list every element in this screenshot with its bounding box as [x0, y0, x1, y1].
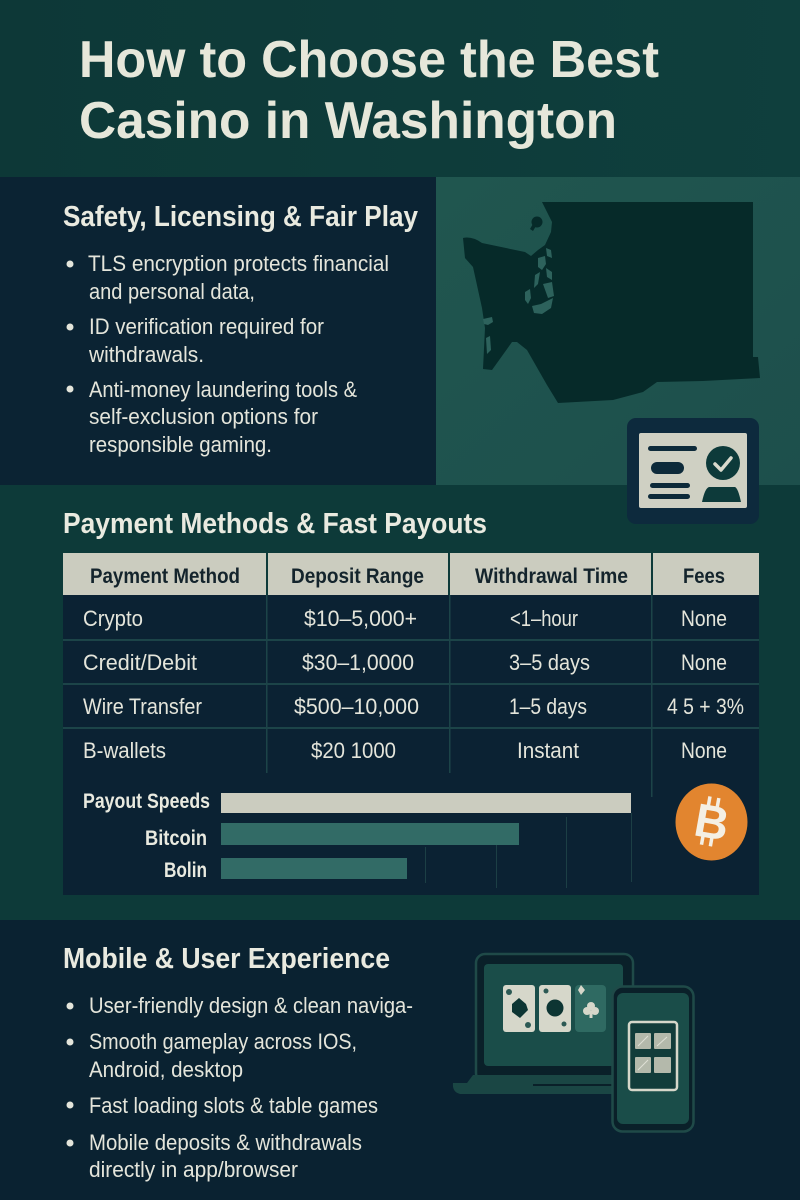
table row: credit/debit: $30–1,0000 — [302, 650, 414, 675]
table row: crypto: <1–hour — [510, 606, 578, 631]
bullet list: safety — [66, 251, 389, 457]
bullet list: safety: Anti-money laundering tools & — [89, 377, 357, 402]
header band with title — [0, 0, 800, 177]
table row: wire transfer: Wire Transfer — [83, 694, 202, 719]
table row: credit/debit — [83, 650, 727, 675]
bullet list: mobile: directly in app/browser — [89, 1157, 298, 1182]
table header — [63, 553, 759, 595]
bullet list: mobile: Mobile deposits & withdrawals — [89, 1130, 362, 1155]
bullet list: mobile: Fast loading slots & table games — [89, 1093, 378, 1118]
bar chart: payout speeds: Payout Speeds — [83, 790, 210, 813]
bullet list: safety: withdrawals. — [88, 342, 204, 367]
bullet list: safety: ID verification required for — [89, 314, 324, 339]
table row: wire transfer: 4 5 + 3% — [667, 694, 744, 719]
bar chart: payout speeds — [83, 790, 632, 888]
title: How to Choose the Best — [79, 31, 659, 89]
table row: crypto: None — [681, 606, 727, 631]
table row: crypto — [83, 606, 727, 631]
table row: e-wallets: Instant — [517, 738, 579, 763]
table row: wire transfer: $500–10,000 — [294, 694, 419, 719]
bar chart: payout speeds: Bolin — [164, 859, 207, 882]
bullet list: mobile: Smooth gameplay across IOS, — [89, 1029, 357, 1054]
table row: wire transfer: 1–5 days — [509, 694, 587, 719]
bullet list: safety: TLS encryption protects financial — [88, 251, 389, 276]
title — [79, 31, 659, 150]
panel: safety, licensing and fair play — [0, 177, 436, 485]
table row: e-wallets — [83, 738, 727, 763]
table row: wire transfer — [83, 694, 744, 719]
table row: e-wallets: $20 1000 — [311, 738, 396, 763]
icon: ID verification card — [627, 418, 759, 524]
icon: laptop with cards — [453, 954, 633, 1094]
table row: credit/debit: None — [681, 650, 727, 675]
table row: e-wallets: B-wallets — [83, 738, 166, 763]
table header: Payment Method — [90, 565, 240, 588]
bullet list: mobile: Android, desktop — [89, 1057, 243, 1082]
heading: mobile: Mobile & User Experience — [63, 943, 390, 975]
bar chart: payout speeds: Bitcoin — [145, 827, 207, 850]
map: Puget Sound islands — [483, 248, 554, 354]
table row: crypto: $10–5,000+ — [304, 606, 417, 631]
bullet list: mobile: User-friendly design & clean naviga- — [89, 993, 413, 1018]
icon: phone with app grid — [612, 986, 694, 1132]
table header: Deposit Range — [291, 565, 424, 588]
heading: payment methods: Payment Methods & Fast Payouts — [63, 508, 487, 540]
bullet list: mobile — [66, 993, 413, 1182]
icon: bitcoin coin: B — [691, 793, 733, 851]
title: Casino in Washington — [79, 92, 617, 150]
table row: credit/debit: 3–5 days — [509, 650, 590, 675]
table row: credit/debit: Credit/Debit — [83, 650, 197, 675]
panel: payment table and payout speeds — [63, 553, 759, 895]
table header: Withdrawal Time — [475, 565, 628, 588]
panel: Washington state map — [436, 177, 800, 485]
heading: safety: Safety, Licensing & Fair Play — [63, 201, 418, 233]
table row: crypto: Crypto — [83, 606, 143, 631]
bullet list: safety: responsible gaming. — [89, 432, 272, 457]
icon: bitcoin coin — [676, 784, 748, 860]
table grid lines — [63, 595, 759, 797]
table header: Fees — [683, 565, 725, 588]
map: Washington silhouette — [463, 202, 760, 403]
bullet list: safety: self-exclusion options for — [89, 404, 318, 429]
playing cards — [503, 985, 606, 1032]
table row: e-wallets: None — [681, 738, 727, 763]
panel: mobile and user experience — [0, 920, 800, 1200]
bullet list: safety: and personal data, — [89, 279, 255, 304]
